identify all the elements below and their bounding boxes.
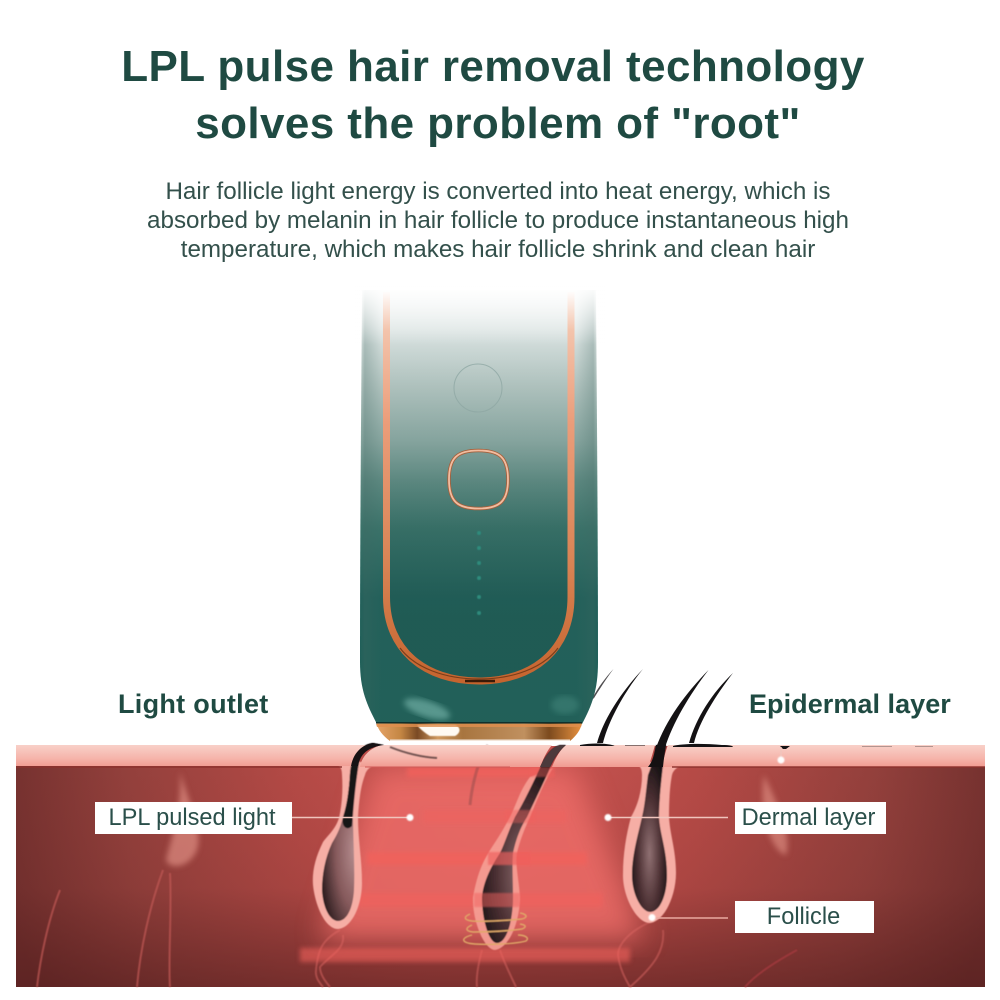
melanin heat rings [464, 913, 527, 944]
title [121, 42, 865, 148]
lpl pulsed light beam [300, 767, 645, 962]
light stripes over follicle 2 [474, 767, 555, 907]
inner panel tint [386, 480, 571, 683]
label: follicle [735, 901, 874, 933]
ghost hairs under device [470, 745, 545, 805]
indicator dots [477, 531, 481, 615]
description text: absorbed by melanin in hair follicle to produce instantaneous high [147, 207, 849, 234]
description text: Hair follicle light energy is converted into heat energy, which is [165, 178, 831, 205]
label: dermal layer: Dermal layer [742, 805, 875, 831]
pointer lines [292, 747, 784, 921]
title: solves the problem of "root" [195, 99, 801, 148]
hair strands [580, 669, 933, 749]
hair-to-follicle continuity [351, 743, 384, 766]
device [355, 285, 605, 741]
gold light outlet ring [376, 722, 582, 741]
mode button [449, 450, 508, 508]
label: epidermal layer: Epidermal layer [749, 689, 951, 719]
skin cross-section [16, 743, 985, 987]
label: LPL pulsed light [95, 802, 292, 834]
follicle 3 [623, 745, 692, 923]
sebaceous gland highlights [166, 772, 787, 866]
title: LPL pulse hair removal technology [121, 42, 865, 91]
blood vessels [37, 870, 797, 987]
description text [147, 178, 849, 263]
device body [360, 290, 598, 724]
epidermal layer band [16, 745, 985, 767]
white top fade [355, 285, 605, 345]
power button ring [454, 364, 502, 412]
follicle 2 [464, 745, 566, 950]
body highlight [402, 694, 452, 724]
label: LPL pulsed light: LPL pulsed light [108, 805, 276, 831]
inner panel copper outline [386, 292, 571, 681]
curved hair shadow under device [390, 747, 437, 758]
follicle 1 [313, 743, 385, 929]
label: follicle: Follicle [767, 904, 840, 930]
description text: temperature, which makes hair follicle shrink and clean hair [181, 236, 815, 263]
label: light outlet: Light outlet [118, 689, 269, 719]
